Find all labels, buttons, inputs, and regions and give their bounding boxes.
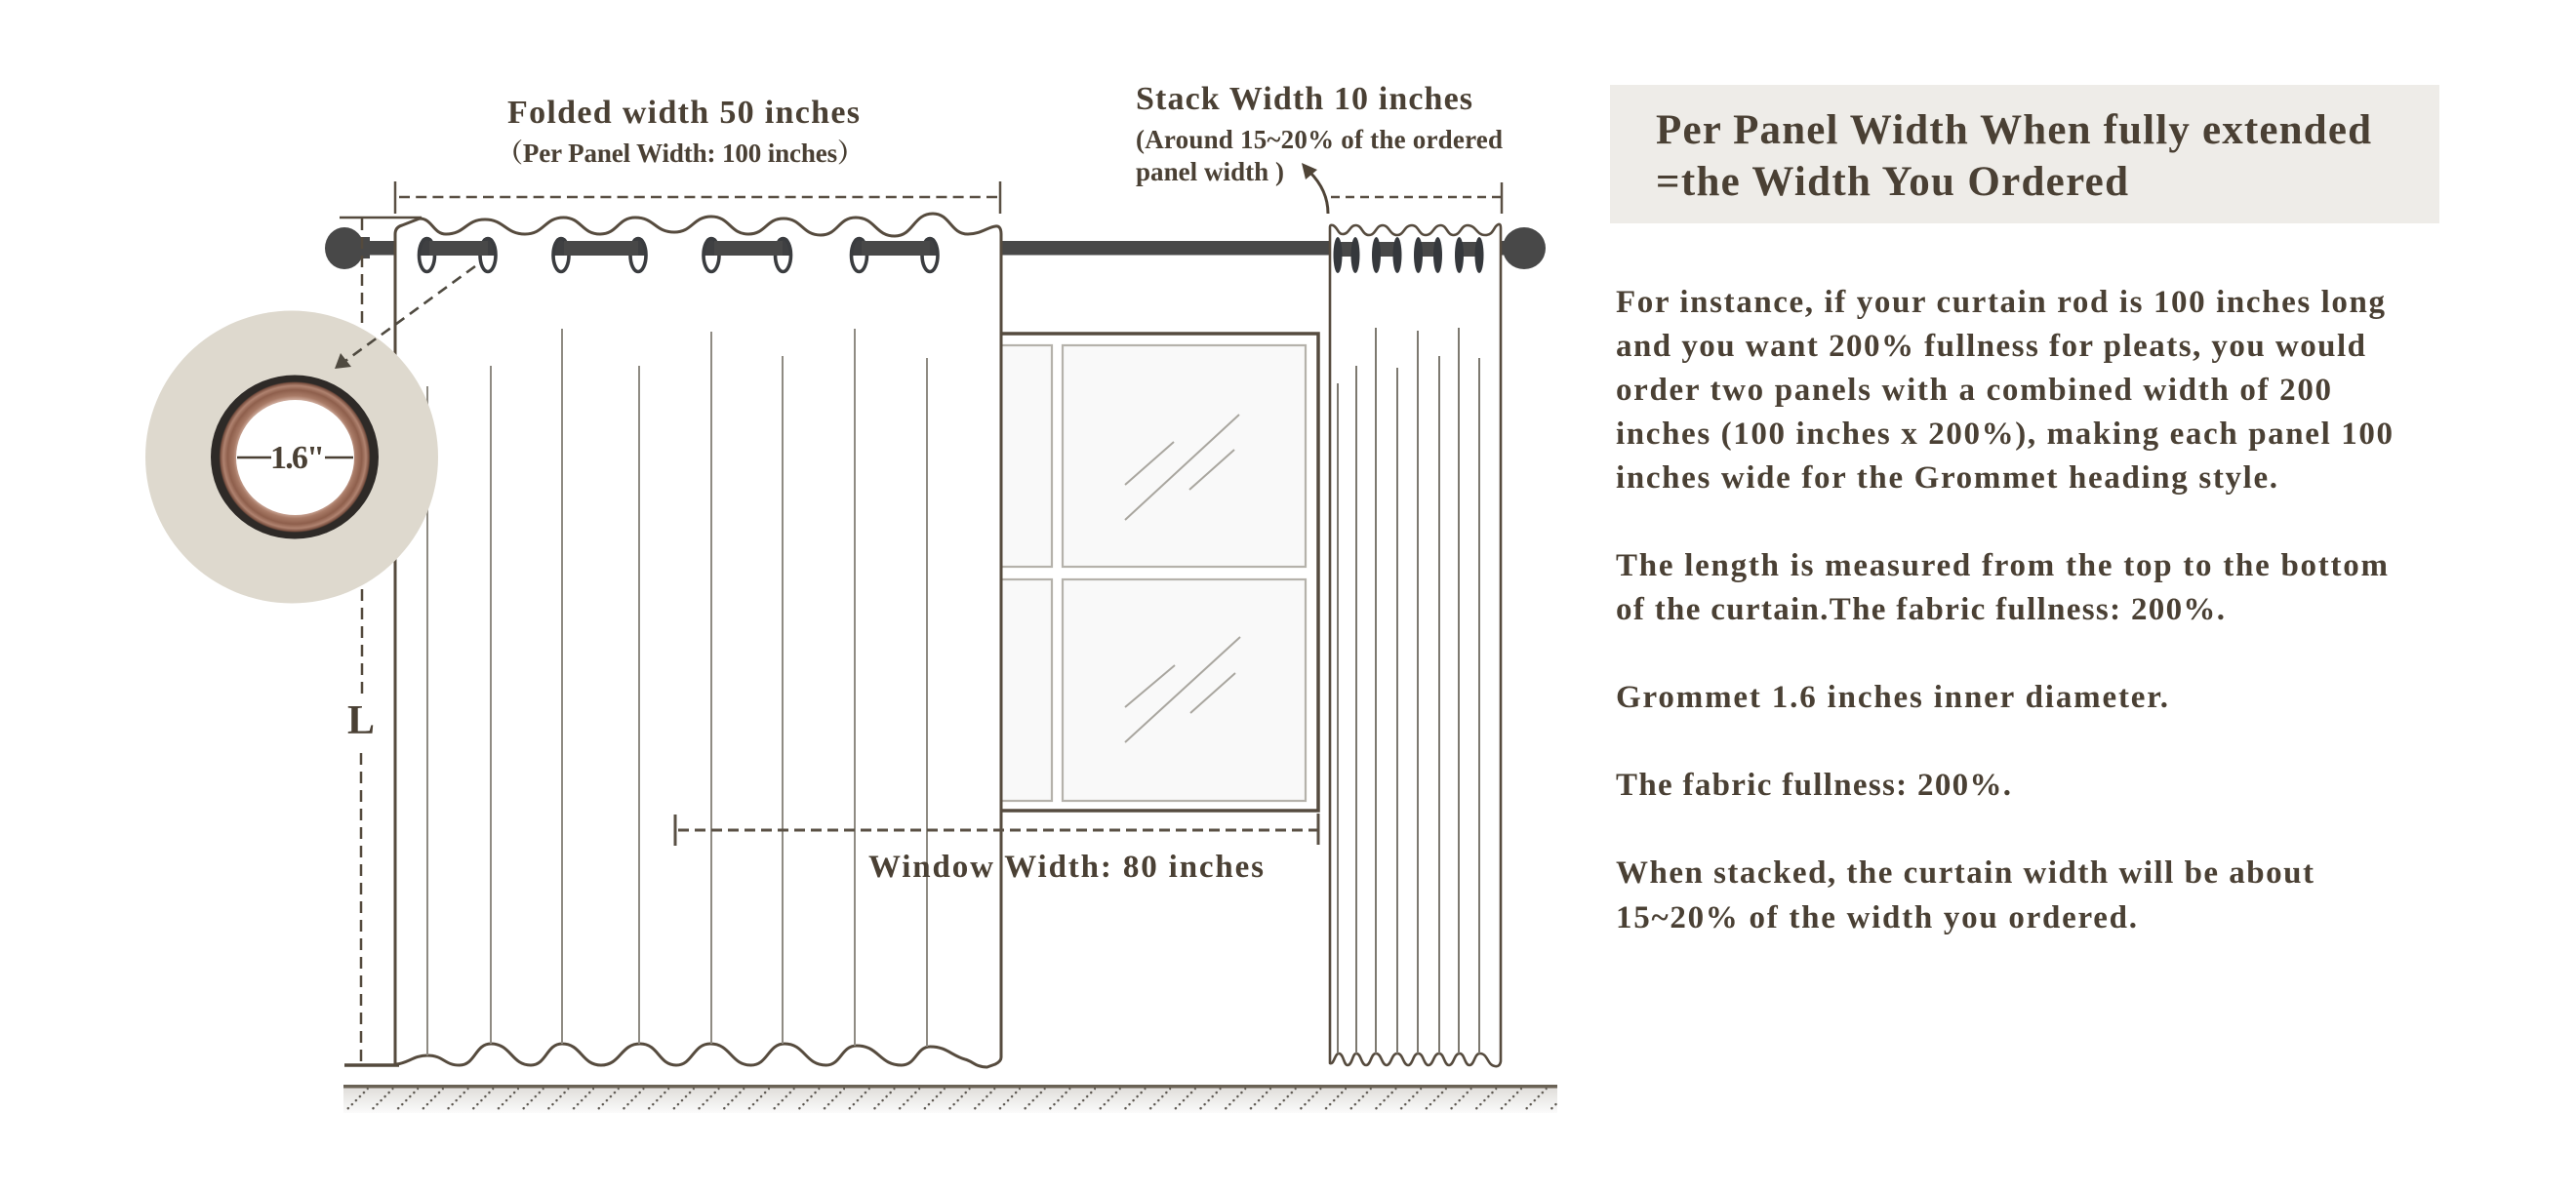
stacked curtain panel outline [1330,224,1501,1066]
grommet diameter measure [237,440,353,476]
label: stack width [1136,81,1503,186]
label: window width: Window Width: 80 inches [868,850,1264,885]
text block: ordering example: order two panels with a combined width of 200 [1616,373,2331,408]
text block: ordering example: For instance, if your curtain rod is 100 inches long [1616,285,2385,320]
text block: length note: of the curtain.The fabric fullness: 200%. [1616,592,2225,627]
text block: length note: The length is measured from the top to the bottom [1616,548,2388,583]
curved arrow to stack width label [1302,163,1328,214]
grommet rings on main curtain [418,237,939,273]
text block: ordering example: inches wide for the Grommet heading style. [1616,460,2277,496]
text block: ordering example: inches (100 inches x 200%), making each panel 100 [1616,417,2393,452]
text block: ordering example [1616,285,2393,496]
grommet detail circle [145,310,438,603]
label: stack width: panel width ) [1136,157,1284,186]
text block: ordering example: and you want 200% fullness for pleats, you would [1616,329,2365,364]
stacked curtain pleat lines [1338,328,1479,1053]
left rod finial [325,227,364,269]
heading panel [1610,85,2439,223]
label: folded width: Folded width 50 inches [507,95,860,131]
text block: stacked width note: 15~20% of the width you ordered. [1616,900,2137,935]
label: folded width: （Per Panel Width: 100 inches） [497,139,864,168]
text block: stacked width note [1616,855,2314,935]
stack width dimension line [1331,182,1502,214]
text block: stacked width note: When stacked, the curtain width will be about [1616,855,2314,891]
folded width dimension line [395,181,1000,214]
main curtain pleat lines [427,329,927,1055]
curtain rod [362,237,1506,258]
length label L: L [347,698,375,743]
label: stack width: (Around 15~20% of the ordered [1136,125,1503,154]
label: stack width: Stack Width 10 inches [1136,81,1472,117]
floor with hatching [343,1085,1557,1115]
label: folded width [497,95,864,168]
text block: fabric fullness: The fabric fullness: 200%. [1616,768,2011,803]
dashed arrow from grommet to detail circle [335,266,475,369]
window width dimension line [675,814,1318,846]
heading panel: Per Panel Width When fully extended [1656,107,2371,153]
text block: grommet size: Grommet 1.6 inches inner diameter. [1616,680,2168,715]
stacked curtain grommets [1333,237,1483,273]
right rod finial [1503,227,1546,269]
grommet diameter measure: 1.6" [270,440,325,476]
length dimension L: dashed vertical with end lines [340,218,422,1065]
heading panel: =the Width You Ordered [1656,159,2128,205]
icon: copper grommet ring [211,375,379,538]
text block: length note [1616,548,2388,627]
main curtain panel outline [395,214,1001,1067]
window frame and panes [976,334,1318,811]
